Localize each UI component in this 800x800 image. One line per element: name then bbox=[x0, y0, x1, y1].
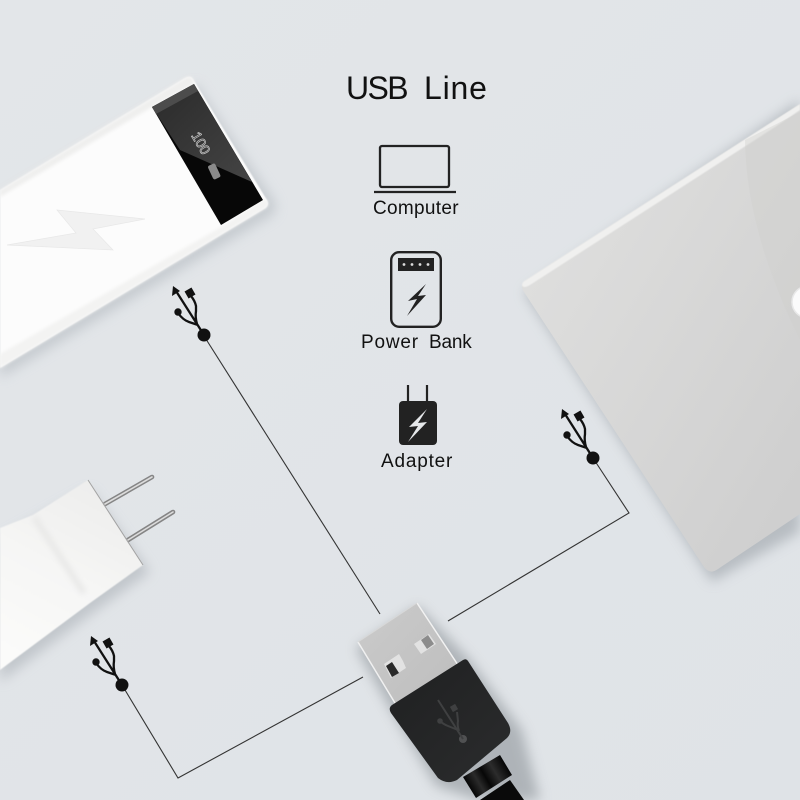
laptop logo bbox=[792, 286, 800, 318]
laptop bbox=[522, 100, 800, 582]
icon: adapter bbox=[399, 385, 437, 445]
USB symbol: laptop bbox=[561, 409, 600, 464]
connector holes bbox=[384, 634, 436, 678]
adapter shadow bbox=[0, 490, 150, 682]
icon: computer bbox=[374, 146, 456, 192]
power bank bevels bbox=[0, 77, 268, 368]
USB plug and cable bbox=[356, 603, 540, 800]
title: USB bbox=[346, 70, 407, 106]
display reading: 100 bbox=[188, 129, 214, 157]
boot USB emblem bbox=[437, 700, 467, 743]
adapter body bbox=[0, 480, 143, 670]
power bank lightning mark bbox=[7, 210, 145, 250]
title: Line bbox=[424, 70, 488, 106]
USB symbol: power bank bbox=[172, 286, 210, 342]
label: power bank: Bank bbox=[429, 332, 472, 353]
black boot bbox=[390, 659, 510, 782]
icon: power bank bbox=[391, 252, 441, 327]
adapter pins bbox=[105, 477, 173, 540]
label: adapter: Adapter bbox=[381, 451, 453, 472]
display battery symbol bbox=[207, 163, 221, 180]
connector lines bbox=[122, 336, 629, 778]
cable bbox=[463, 755, 524, 800]
power bank bbox=[0, 77, 276, 378]
label: computer: Computer bbox=[373, 198, 459, 219]
wall adapter bbox=[0, 477, 173, 682]
label: power bank: Power bbox=[361, 332, 419, 353]
metal connector bbox=[358, 603, 458, 708]
USB symbol: adapter bbox=[90, 636, 128, 692]
power bank display bbox=[152, 84, 263, 225]
